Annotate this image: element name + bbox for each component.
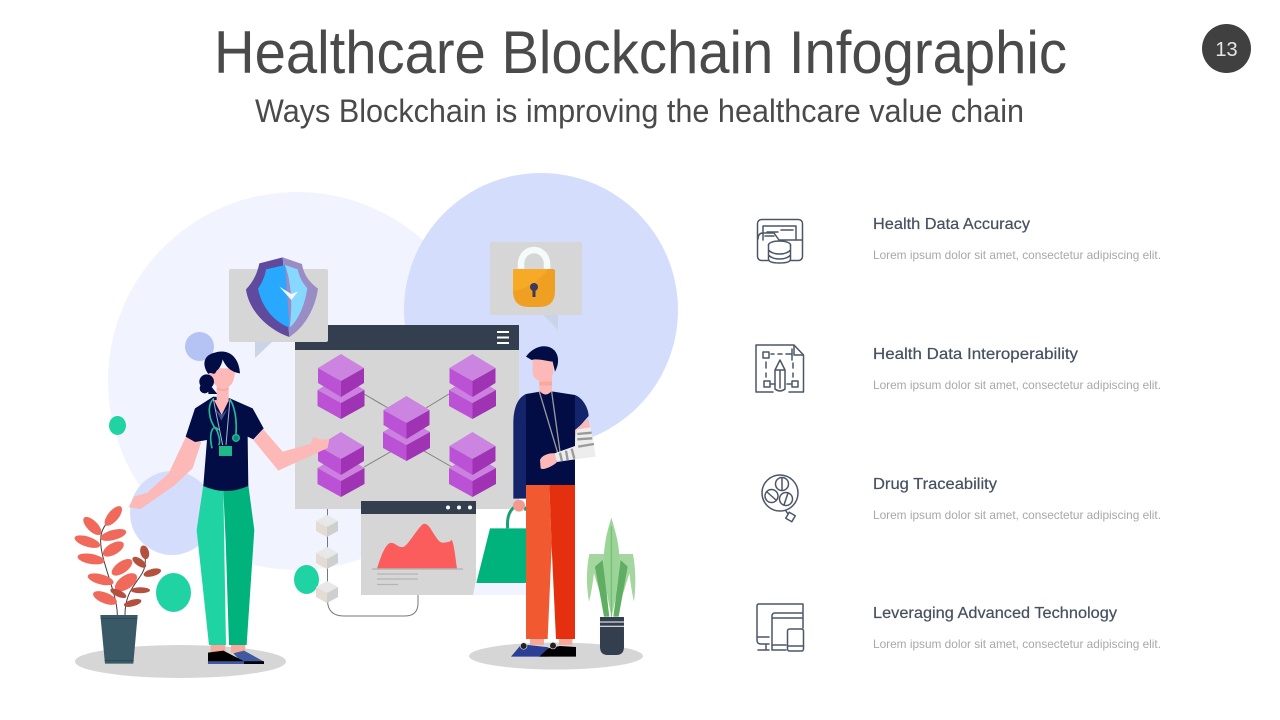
cast <box>554 427 596 462</box>
subtitle: Ways Blockchain is improving the healthcare value chain <box>255 93 1024 129</box>
trousers <box>526 485 552 639</box>
heading: Drug Traceability <box>873 476 997 493</box>
page number badge: 13 <box>1215 39 1238 61</box>
icon: shield <box>246 257 318 337</box>
block stack bottom left <box>318 432 364 497</box>
man with injured arm <box>511 346 596 657</box>
icon: data folder <box>758 220 802 263</box>
plant: coral in pot <box>73 503 162 664</box>
plant: palm in pot <box>587 518 635 655</box>
trousers <box>197 485 226 645</box>
list item: Health Data Interoperability <box>756 345 1161 392</box>
heading: Health Data Accuracy <box>873 216 1030 233</box>
shield speech bubble <box>229 257 328 358</box>
heading: Leveraging Advanced Technology <box>873 605 1117 622</box>
neck and head <box>539 373 552 394</box>
menu icon <box>497 332 509 343</box>
forearm skin <box>575 418 590 437</box>
icon: blueprint document <box>756 345 804 392</box>
network links <box>364 394 452 467</box>
icon: padlock <box>513 250 555 307</box>
list item: Leveraging Advanced Technology <box>757 604 1161 651</box>
lanyard <box>539 392 560 453</box>
heading: Health Data Interoperability <box>873 346 1078 363</box>
chart window <box>361 501 476 595</box>
pot <box>100 615 138 664</box>
chain of small cubes <box>316 509 418 616</box>
icon: responsive devices <box>757 604 804 651</box>
title: Healthcare Blockchain Infographic <box>214 19 1067 86</box>
blockchain window <box>295 325 519 509</box>
hand <box>540 453 557 469</box>
shoes <box>233 651 264 664</box>
area chart <box>377 524 457 568</box>
neck and face <box>217 382 229 402</box>
left arm <box>513 394 526 499</box>
shoes <box>511 645 548 657</box>
body text: Lorem ipsum dolor sit amet, consectetur adipiscing elit. <box>873 248 1161 262</box>
block stack top left <box>318 354 364 419</box>
stethoscope and badge <box>209 398 236 448</box>
sleeve back <box>575 395 589 432</box>
body text: Lorem ipsum dolor sit amet, consectetur adipiscing elit. <box>873 508 1161 522</box>
list item: Health Data Accuracy <box>758 216 1161 263</box>
body text: Lorem ipsum dolor sit amet, consectetur adipiscing elit. <box>873 637 1161 651</box>
pot <box>600 617 624 655</box>
ankles <box>530 637 544 645</box>
body text: Lorem ipsum dolor sit amet, consectetur adipiscing elit. <box>873 378 1161 392</box>
block stack center <box>383 396 430 461</box>
list item: Drug Traceability <box>762 475 1161 522</box>
ankles <box>211 644 225 653</box>
page number badge <box>1202 24 1251 73</box>
block stack top right <box>449 354 496 419</box>
lock speech bubble <box>490 242 582 330</box>
icon: magnified pills <box>762 475 798 522</box>
shirt <box>186 397 264 491</box>
illustration: background shapes <box>75 173 678 678</box>
shopping bag <box>476 507 527 583</box>
block stack bottom right <box>449 432 496 497</box>
arms <box>129 437 201 509</box>
shirt <box>526 392 575 485</box>
hair <box>204 352 240 374</box>
woman doctor <box>129 352 329 664</box>
